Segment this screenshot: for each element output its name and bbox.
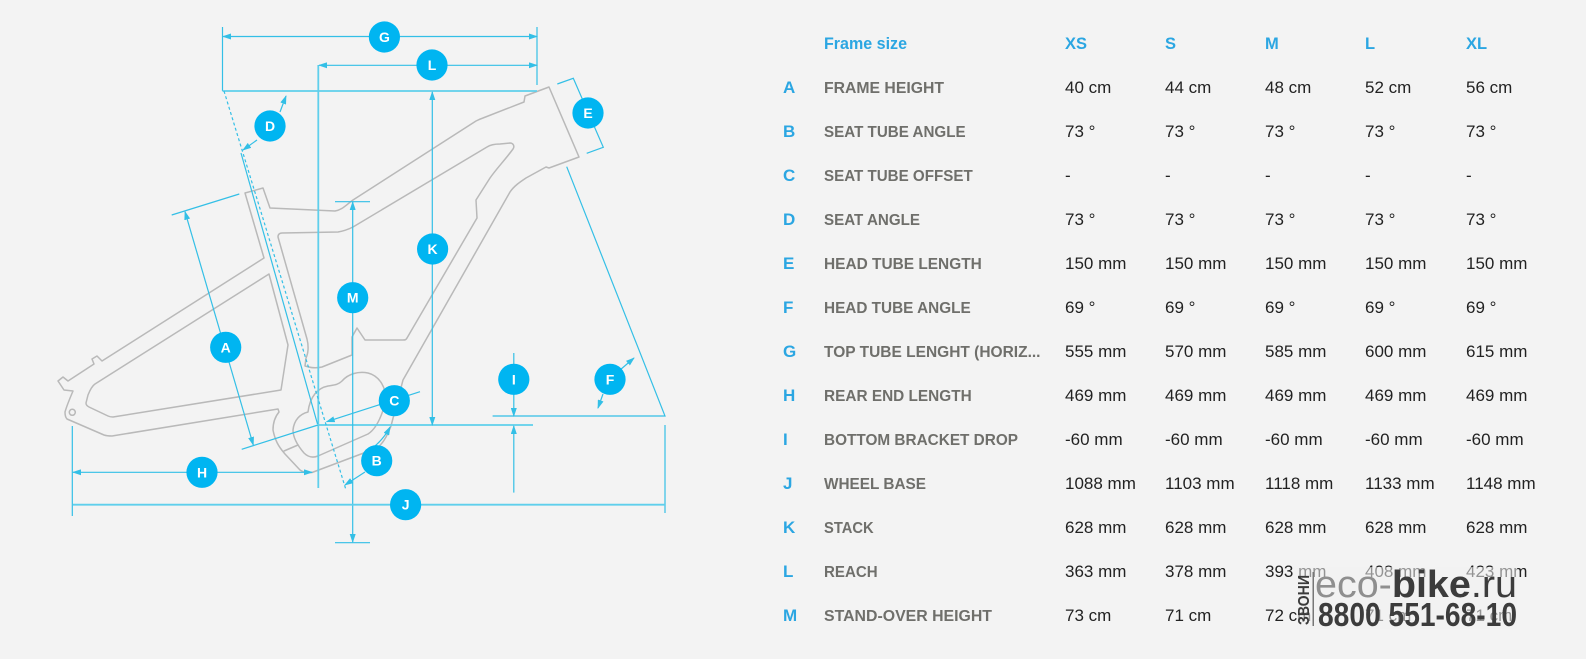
row A: frame height: A <box>783 78 795 97</box>
row F: head tube angle: 69 ° <box>1065 298 1095 317</box>
row F: head tube angle: HEAD TUBE ANGLE <box>824 300 971 317</box>
row J: wheel base: WHEEL BASE <box>824 476 926 493</box>
row A: frame height: 44 cm <box>1165 78 1211 97</box>
dimension I: bottom bracket drop: I <box>512 371 516 387</box>
watermark: eco-bike.ru phone: eco-bike.ru <box>1315 564 1517 606</box>
dimension E: head tube length: E <box>583 105 593 121</box>
row L: reach <box>783 562 1527 581</box>
row K: stack: 628 mm <box>1365 518 1426 537</box>
dimension E: head tube length <box>557 78 604 153</box>
dimension F: head tube angle <box>493 167 665 416</box>
row F: head tube angle: 69 ° <box>1265 298 1295 317</box>
table header row: S <box>1165 35 1176 53</box>
row I: bottom bracket drop: I <box>783 430 788 449</box>
row A: frame height <box>783 78 1512 97</box>
row H: rear end length: 469 mm <box>1365 386 1426 405</box>
row H: rear end length: 469 mm <box>1265 386 1326 405</box>
row K: stack: 628 mm <box>1065 518 1126 537</box>
row K: stack: K <box>783 518 796 537</box>
row G: top tube length: 615 mm <box>1466 342 1527 361</box>
row I: bottom bracket drop: -60 mm <box>1365 430 1423 449</box>
row B: seat tube angle: 73 ° <box>1466 122 1496 141</box>
dimension D: seat angle: D <box>265 118 275 134</box>
row J: wheel base: J <box>783 474 792 493</box>
row I: bottom bracket drop: BOTTOM BRACKET DROP <box>824 432 1018 449</box>
row I: bottom bracket drop: -60 mm <box>1065 430 1123 449</box>
row D: seat angle: 73 ° <box>1065 210 1095 229</box>
dimension H: rear end length <box>72 426 312 516</box>
row D: seat angle <box>783 210 1496 229</box>
geometry table <box>783 35 1536 625</box>
row L: reach: 423 mm <box>1466 562 1527 581</box>
watermark: eco-bike.ru phone: 8800 551-68-10 <box>1318 596 1517 633</box>
row J: wheel base: 1148 mm <box>1466 474 1536 493</box>
row D: seat angle: 73 ° <box>1165 210 1195 229</box>
row E: head tube length: 150 mm <box>1065 254 1126 273</box>
row C: seat tube offset: - <box>1065 166 1071 185</box>
row D: seat angle: SEAT ANGLE <box>824 212 920 229</box>
row M: stand-over height: 72 cm <box>1265 606 1311 625</box>
row M: stand-over height: 71 cm <box>1365 606 1411 625</box>
row L: reach: L <box>783 562 793 581</box>
row H: rear end length <box>783 386 1527 405</box>
dimension M: stand-over height <box>335 202 370 543</box>
row J: wheel base: 1133 mm <box>1365 474 1435 493</box>
row B: seat tube angle: 73 ° <box>1265 122 1295 141</box>
row F: head tube angle: 69 ° <box>1365 298 1395 317</box>
row F: head tube angle: 69 ° <box>1466 298 1496 317</box>
row L: reach: 408 mm <box>1365 562 1426 581</box>
dimension G: top tube length: G <box>379 29 390 45</box>
dimension L: reach: L <box>428 57 437 73</box>
row M: stand-over height: STAND-OVER HEIGHT <box>824 608 992 625</box>
row J: wheel base <box>783 474 1536 493</box>
row I: bottom bracket drop: -60 mm <box>1165 430 1223 449</box>
row J: wheel base: 1118 mm <box>1265 474 1333 493</box>
row C: seat tube offset: C <box>783 166 795 185</box>
row K: stack <box>783 518 1527 537</box>
row B: seat tube angle: 73 ° <box>1065 122 1095 141</box>
dimension C: seat tube offset <box>327 385 420 422</box>
row A: frame height: FRAME HEIGHT <box>824 80 944 97</box>
row M: stand-over height <box>783 606 1512 625</box>
dimension A: frame height: A <box>221 339 231 355</box>
row C: seat tube offset: - <box>1165 166 1171 185</box>
row D: seat angle: 73 ° <box>1365 210 1395 229</box>
row E: head tube length: 150 mm <box>1165 254 1226 273</box>
row K: stack: STACK <box>824 520 874 537</box>
row A: frame height: 52 cm <box>1365 78 1411 97</box>
row B: seat tube angle: 73 ° <box>1165 122 1195 141</box>
table header row: M <box>1265 35 1279 53</box>
dimension D: seat angle <box>243 96 286 150</box>
dimension G: top tube length <box>222 21 537 91</box>
row B: seat tube angle: B <box>783 122 795 141</box>
row B: seat tube angle: 73 ° <box>1365 122 1395 141</box>
row J: wheel base: 1088 mm <box>1065 474 1136 493</box>
dimension F: head tube angle: F <box>606 371 615 387</box>
row G: top tube length: TOP TUBE LENGHT (HORIZ... <box>824 344 1040 361</box>
table header row: XS <box>1065 35 1087 53</box>
row F: head tube angle <box>783 298 1496 317</box>
bike frame outline <box>58 87 579 473</box>
row E: head tube length: 150 mm <box>1365 254 1426 273</box>
table header row <box>824 35 1487 53</box>
dimension I: bottom bracket drop <box>498 353 529 493</box>
row I: bottom bracket drop: -60 mm <box>1265 430 1323 449</box>
row G: top tube length: 585 mm <box>1265 342 1326 361</box>
row M: stand-over height: 73 cm <box>1065 606 1111 625</box>
table header row: XL <box>1466 35 1487 53</box>
row E: head tube length: 150 mm <box>1265 254 1326 273</box>
row B: seat tube angle: SEAT TUBE ANGLE <box>824 124 966 141</box>
dimension K: stack <box>222 91 537 425</box>
row C: seat tube offset: - <box>1265 166 1271 185</box>
row A: frame height: 48 cm <box>1265 78 1311 97</box>
row L: reach: 378 mm <box>1165 562 1226 581</box>
row K: stack: 628 mm <box>1265 518 1326 537</box>
row H: rear end length: 469 mm <box>1165 386 1226 405</box>
row F: head tube angle: F <box>783 298 793 317</box>
row D: seat angle: 73 ° <box>1466 210 1496 229</box>
row E: head tube length: 150 mm <box>1466 254 1527 273</box>
row H: rear end length: H <box>783 386 795 405</box>
bike frame geometry diagram <box>58 21 665 543</box>
row B: seat tube angle <box>783 122 1496 141</box>
row G: top tube length: 600 mm <box>1365 342 1426 361</box>
row E: head tube length <box>783 254 1527 273</box>
dimension B and seat tube angle lines: B <box>372 453 382 469</box>
row K: stack: 628 mm <box>1466 518 1527 537</box>
row M: stand-over height: 71 cm <box>1165 606 1211 625</box>
row M: stand-over height: M <box>783 606 797 625</box>
dimension A: frame height <box>172 194 318 449</box>
watermark: eco-bike.ru phone <box>1296 564 1517 633</box>
row I: bottom bracket drop <box>783 430 1524 449</box>
row A: frame height: 56 cm <box>1466 78 1512 97</box>
row L: reach: 363 mm <box>1065 562 1126 581</box>
dimension J: wheel base: J <box>402 497 409 513</box>
dimension H: rear end length: H <box>197 464 207 480</box>
row K: stack: 628 mm <box>1165 518 1226 537</box>
row L: reach: REACH <box>824 564 878 581</box>
dimension L: reach <box>318 49 537 488</box>
row H: rear end length: 469 mm <box>1466 386 1527 405</box>
row E: head tube length: HEAD TUBE LENGTH <box>824 256 982 273</box>
dimension M: stand-over height: M <box>347 290 359 306</box>
row C: seat tube offset: SEAT TUBE OFFSET <box>824 168 973 185</box>
row D: seat angle: 73 ° <box>1265 210 1295 229</box>
watermark: eco-bike.ru phone: ЗВОНИ <box>1296 575 1313 625</box>
row J: wheel base: 1103 mm <box>1165 474 1235 493</box>
dimension K: stack: K <box>428 241 438 257</box>
row G: top tube length: 570 mm <box>1165 342 1226 361</box>
row H: rear end length: 469 mm <box>1065 386 1126 405</box>
row C: seat tube offset: - <box>1466 166 1472 185</box>
row A: frame height: 40 cm <box>1065 78 1111 97</box>
row G: top tube length: G <box>783 342 796 361</box>
table header row: Frame size <box>824 35 907 53</box>
dimension C: seat tube offset: C <box>389 393 399 409</box>
row H: rear end length: REAR END LENGTH <box>824 388 972 405</box>
row E: head tube length: E <box>783 254 794 273</box>
row M: stand-over height: 71 cm <box>1466 606 1512 625</box>
row C: seat tube offset: - <box>1365 166 1371 185</box>
table header row: L <box>1365 35 1375 53</box>
row G: top tube length: 555 mm <box>1065 342 1126 361</box>
row D: seat angle: D <box>783 210 795 229</box>
row L: reach: 393 mm <box>1265 562 1326 581</box>
dimension B and seat tube angle lines <box>224 91 392 490</box>
row C: seat tube offset <box>783 166 1472 185</box>
row G: top tube length <box>783 342 1527 361</box>
dimension J: wheel base <box>73 425 665 520</box>
row F: head tube angle: 69 ° <box>1165 298 1195 317</box>
row I: bottom bracket drop: -60 mm <box>1466 430 1524 449</box>
